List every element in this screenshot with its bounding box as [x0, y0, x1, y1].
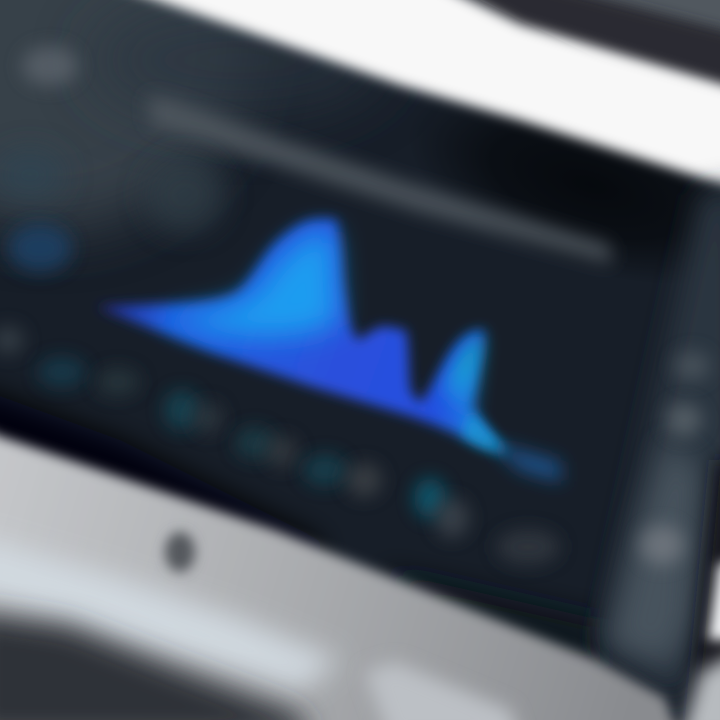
- top white frame band: [100, 0, 720, 190]
- bottom silver laptop bezel: [0, 422, 680, 720]
- icon: laptop logo: [165, 532, 195, 572]
- left sidebar blurred items: [0, 46, 225, 272]
- area chart: [97, 219, 562, 482]
- bottom right silver corner and white highlight: [680, 555, 720, 720]
- top right dark laptop body: [440, 0, 720, 105]
- screen title bar, blurred heading: [148, 96, 612, 264]
- x-axis blurred labels: [0, 326, 560, 565]
- bezel highlights and keyboard shadow: [0, 535, 520, 720]
- right screen edge and side panel: [600, 185, 720, 720]
